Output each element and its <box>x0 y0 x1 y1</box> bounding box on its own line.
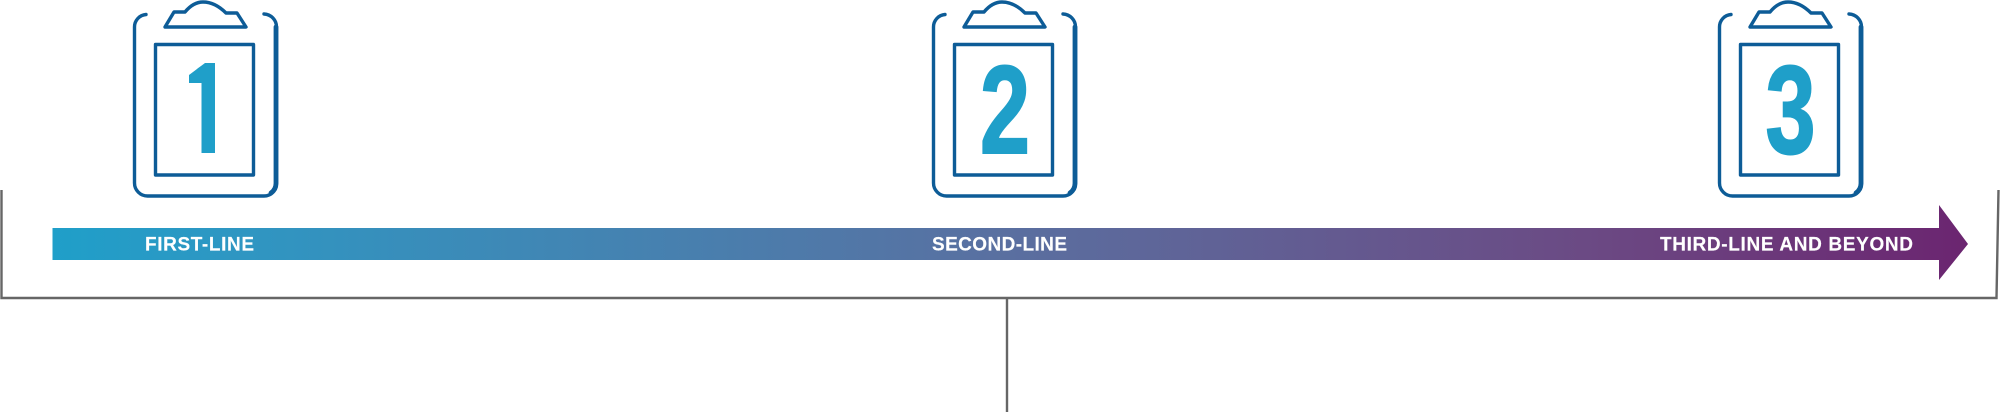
icon: clipboard 1 <box>134 2 277 196</box>
label: first-line: FIRST-LINE <box>145 234 254 256</box>
icon: clipboard 1: 1 <box>176 8 240 189</box>
arrow: treatment line progression <box>52 205 1968 280</box>
label: third-line and beyond: THIRD-LINE AND BEYOND <box>1660 234 1913 256</box>
icon: clipboard 3 <box>1720 2 1862 196</box>
label: second-line: SECOND-LINE <box>932 234 1067 256</box>
icon: clipboard 2: 2 <box>980 41 1030 181</box>
icon: clipboard 2 <box>933 2 1076 196</box>
icon: clipboard 3: 3 <box>1765 41 1816 181</box>
bracket connector <box>2 190 1998 412</box>
